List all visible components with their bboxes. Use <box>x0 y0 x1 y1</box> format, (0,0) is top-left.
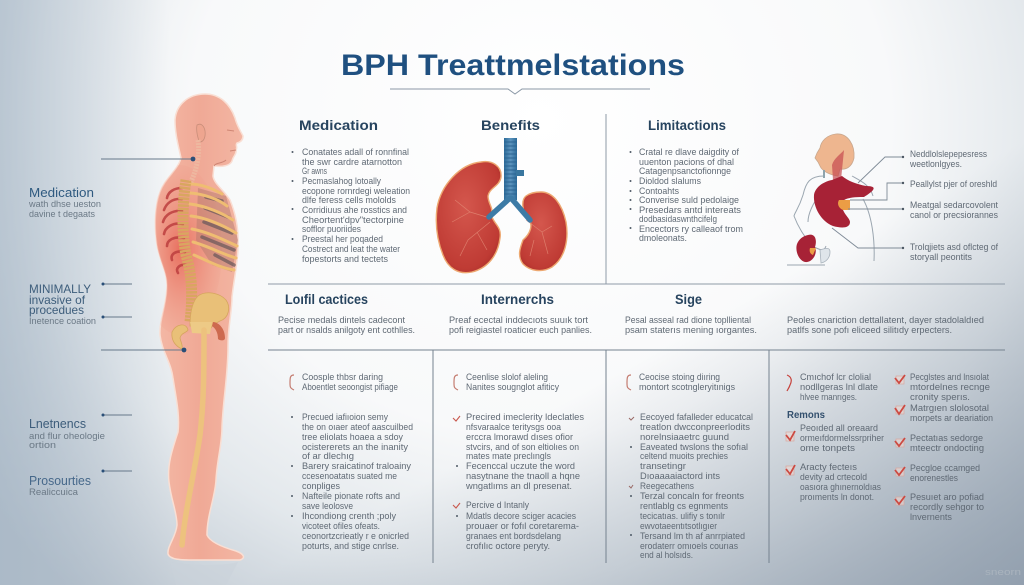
medication list: Cheortent'dpv"tectorpine <box>302 215 404 226</box>
intro: Pecise medals dintels cadecont <box>278 315 405 326</box>
front ribs <box>190 184 237 270</box>
label: prosourties: Prosourties <box>29 473 91 488</box>
list: Eecoyed fafalleder educatcal <box>640 412 753 423</box>
list <box>453 412 584 552</box>
medication list <box>292 147 410 265</box>
checklist left: proıments ln donot. <box>800 492 874 503</box>
list: rentlablg cs egnments <box>640 501 728 512</box>
icon: bracket <box>627 375 631 390</box>
summary: Cmıchof lcr clolial <box>800 372 871 383</box>
list: ewvotaeentıtsotlıgıer <box>640 521 717 532</box>
limitations list: Cratal re dlave daigdity of <box>639 147 739 158</box>
summary: Nanites sougnglot afiticy <box>466 382 559 393</box>
checklist right: morpets ar deariation <box>910 413 993 424</box>
panel: limitations <box>630 117 743 244</box>
summary: Ceocise stoing diıring <box>639 372 720 383</box>
label: minimally invasive <box>29 282 96 327</box>
list: erodaterr omıoels courıas <box>640 541 738 552</box>
floor reflection <box>170 562 238 585</box>
limitations list: Catagenpsanctofionnge <box>639 166 731 177</box>
list: nasytnane the tnaoll a hqne <box>466 471 580 482</box>
label: minimally invasive: procedues <box>29 303 84 317</box>
list: Barery sraicatinof traloainy <box>302 461 411 472</box>
checklist left: Aracty fecteıs <box>800 462 857 473</box>
body silhouette <box>155 94 243 560</box>
list: norelnsiaaetrc guund <box>640 432 729 443</box>
medication list: ecopone rornrdegi weleation <box>302 186 410 197</box>
dark gaps between ribs <box>202 197 234 265</box>
icon: head <box>815 134 854 176</box>
label: medication: davine t degaats <box>29 209 95 220</box>
list: the on oıaer ateof aascuilbed <box>302 422 413 433</box>
list: poturts, and stige cnrlse. <box>302 541 399 552</box>
intro: Peoles cnariction dettallatent, dayer stadolaldıed <box>787 315 984 326</box>
list: erccra lmorawd dıses ofior <box>466 432 573 443</box>
list: crofılıc octore peryty. <box>466 541 550 552</box>
leader lines <box>832 157 903 248</box>
list: of ar dlechıg <box>302 451 354 462</box>
list: Eaveated twslons the sofıal <box>640 442 748 453</box>
heading: remons: Remons <box>787 409 825 421</box>
icon: large organ <box>814 176 874 227</box>
label: prosourties <box>29 473 91 498</box>
ear <box>197 124 205 142</box>
intro: psam staterıs mening ıorgantes. <box>625 325 757 336</box>
list: wngatlıms an dl presenat. <box>465 481 572 492</box>
list: Terzal concaln for freonts <box>640 491 744 502</box>
medication list: Gr awns <box>302 166 327 177</box>
list: transetingr <box>640 461 686 472</box>
intro: Preaf ecectal inddecıots suuık tort <box>449 315 588 326</box>
intro <box>787 315 984 336</box>
heading: Loıfil cactices <box>285 291 368 307</box>
panel: medication <box>292 117 410 265</box>
list: ocistererets an the inanity <box>302 442 408 453</box>
list: Ihcondiong crenth ;poly <box>302 511 396 522</box>
checklist right: Pesuıet aro pofiad <box>910 492 984 503</box>
section dividers <box>268 114 1005 563</box>
label: minimally invasive: invasive of <box>29 293 86 307</box>
list: tree eliolats hoaea a sdoy <box>302 432 403 443</box>
checklist left: devity ad crtecold <box>800 472 867 483</box>
list: Nafteile pionate rofts and <box>302 491 400 502</box>
medication list: Preestal her poqaded <box>302 234 383 245</box>
limitations list: dodbasidaswnthcifelg <box>639 214 717 225</box>
back ribs <box>163 188 186 273</box>
limitations list: Encectors ry calleaof trom <box>639 224 743 235</box>
label: medication: wath dhse ueston <box>28 199 101 210</box>
checklist right: Pectatıas sedorge <box>910 433 983 444</box>
spine <box>183 180 192 322</box>
medication list: fopestorts and tectets <box>302 254 388 265</box>
label: lnetnencs <box>29 416 105 451</box>
summary: nodllgeras lnl dlate <box>800 382 878 393</box>
panel: benefits <box>436 117 567 273</box>
intro: pofi reigiastel roaticıer euch panlies. <box>449 325 592 336</box>
intro: Pesal asseal rad dione toplliental <box>625 315 751 326</box>
checklist right <box>895 372 993 523</box>
list: save leolosve <box>302 501 353 512</box>
list: celtend muoits prechies <box>640 451 728 462</box>
heading: Sige <box>675 291 702 307</box>
summary <box>800 372 878 403</box>
label: minimally invasive: MINIMALLY <box>29 282 91 296</box>
checklist right: Matrgıen slolosotal <box>910 403 989 414</box>
checklist right: recordly sehgor to <box>910 502 984 513</box>
heading: benefits: Benefits <box>481 117 540 133</box>
checklist left <box>786 423 884 503</box>
checklist left: ormeıfdormelssrpriher <box>800 433 884 444</box>
list: tecicatıas. ulifiy s tonılr <box>640 511 725 522</box>
summary <box>302 372 398 393</box>
summary <box>466 372 559 393</box>
diagram labels <box>909 149 998 263</box>
column: internerchs <box>449 291 592 552</box>
diagram labels: storyall peontits <box>910 252 972 263</box>
column: lofil cactices <box>278 291 415 552</box>
limitations list <box>630 147 743 244</box>
checklist right: mteectr ondocting <box>910 443 984 454</box>
medication list: Pecmaslahog lotoally <box>302 176 381 187</box>
icon: red bracket <box>787 375 791 391</box>
medication list: Corridiuus ahe rosstics and <box>302 205 407 216</box>
icon: small kidney <box>796 235 816 262</box>
list: stvcirs, and of son eltiolıes on <box>466 442 579 453</box>
label: prosourties: Realiccuica <box>29 487 79 498</box>
medication list: Conatates adall of ronnfinal <box>302 147 409 158</box>
title: BPH Treattmelstations <box>341 49 685 82</box>
list: Fecenccal uczute the word <box>466 461 575 472</box>
checklist left: oasıora ghınernoldıas <box>800 482 881 493</box>
medication list: dlfe feress cells mololds <box>302 195 396 206</box>
diagram labels: canol or precsiorannes <box>910 210 998 221</box>
icon: bracket <box>290 375 294 390</box>
anatomy figure: standing body <box>154 93 244 561</box>
heading: Internerchs <box>481 291 554 307</box>
diagram labels: Trolqjiets asd oflcteg of <box>910 242 998 253</box>
summary: Coosple thbsr daring <box>302 372 383 383</box>
diagram labels: Neddlolslepepesress <box>910 149 987 160</box>
list <box>629 412 753 561</box>
icon: hand <box>820 248 830 263</box>
medication list: the swr cardre atarnotton <box>302 157 402 168</box>
limitations list: Presedars antd intereats <box>639 205 741 216</box>
pelvis <box>190 293 229 328</box>
list: vicoteet ofiles ofeats. <box>302 521 380 532</box>
list: Reegecathens <box>640 481 694 492</box>
column: sige <box>625 291 757 561</box>
summary: Aboentlet seoongist pifiage <box>302 382 398 393</box>
intro: patlfs sone pofı eliceed silitıdy erpecters. <box>787 325 952 336</box>
list: Percive d Intanly <box>466 500 529 511</box>
summary: hlvee rnanrıges. <box>800 392 857 403</box>
list: conpliges <box>302 481 340 492</box>
list: Mdatls decore sciger acacies <box>466 511 576 522</box>
intro: part or nsalds anilgoty ent cothlles. <box>278 325 415 336</box>
title <box>341 49 685 94</box>
list: nfsvaraalce teritysgs ooa <box>466 422 562 433</box>
medication list: Costrect and leat the water <box>302 244 400 255</box>
limitations list: Dioldod slalums <box>639 176 701 187</box>
upper spine <box>191 140 199 182</box>
leader lines <box>101 157 195 472</box>
checklist right: cronity sperıs. <box>910 392 970 403</box>
list: ccesenoatatıs suated me <box>302 471 397 482</box>
label: minimally invasive: Inetence coation <box>29 316 96 327</box>
summary <box>639 372 735 393</box>
diagram labels: Peallylst pjer of oreshld <box>910 179 997 190</box>
list: ceonortzcrieatly r e onicrled <box>302 531 409 542</box>
label: lnetnencs: Lnetnencs <box>29 416 86 431</box>
intro <box>449 315 592 336</box>
limitations list: dmoleonats. <box>639 233 687 244</box>
checklist right: Pecglstes arıd lnsıolat <box>910 372 989 383</box>
icon: bracket <box>454 375 458 390</box>
limitations list: Contoahts <box>639 186 679 197</box>
heading: medication: Medication <box>299 117 378 133</box>
medication list: sofflor puoriides <box>302 224 361 235</box>
list: Dıoaaaaiactord ints <box>640 471 720 482</box>
label: lnetnencs: and flur oheologie <box>29 431 105 442</box>
checklist left: Peoıded all oreaard <box>800 423 878 434</box>
column: fourth <box>786 315 993 523</box>
list <box>291 412 413 552</box>
list: Precued iafiıoion semy <box>302 412 388 423</box>
list: end al holsıds. <box>640 550 693 561</box>
checklist right: mtordelnes recnge <box>910 382 990 393</box>
icon: torso outline <box>794 176 874 261</box>
checklist left: ome tonpets <box>800 443 855 454</box>
icon: kidneys and ureter <box>436 138 567 273</box>
watermark: sneorn <box>985 567 1021 577</box>
summary: Ceenlise slolof aleling <box>466 372 548 383</box>
heading: limitations: Limitactions <box>648 117 726 133</box>
intro <box>625 315 757 336</box>
list: mates mate preclıngls <box>466 451 551 462</box>
summary: montort scotngleryitınigs <box>639 382 735 393</box>
checklist right: lnvernents <box>910 512 952 523</box>
list: treatlon dwcconpreerlodits <box>640 422 750 433</box>
limitations list: Converise suld pedolaige <box>639 195 739 206</box>
list: Precired imeclerity ldeclatles <box>466 412 584 423</box>
right anatomy diagram <box>787 134 998 265</box>
list: Tersand lm th af anrrpiated <box>640 531 745 542</box>
list: granaes ent bordsdelang <box>466 531 561 542</box>
checklist right: Pecgloe ccamged <box>910 463 980 474</box>
chest cavity shading <box>196 188 238 272</box>
label: medication: Medication <box>29 185 94 200</box>
label: medication <box>28 185 101 220</box>
list: prouaer or fofıl coretarema- <box>466 521 579 532</box>
intro <box>278 315 415 336</box>
leg bone <box>182 330 204 545</box>
limitations list: uuenton pacions of dhal <box>639 157 734 168</box>
left labels <box>28 185 105 498</box>
diagram labels: weetlonlgyes. <box>909 159 962 170</box>
torso tint <box>155 165 214 326</box>
face details <box>214 130 236 166</box>
checklist right: enorenestles <box>910 473 958 484</box>
diagram labels: Meatgal sedarcovolent <box>910 200 998 211</box>
label: lnetnencs: ortion <box>29 440 56 451</box>
